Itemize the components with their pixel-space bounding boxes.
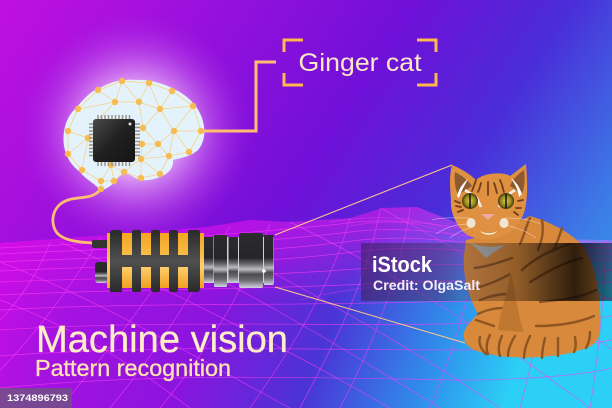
- cat body stripes: [475, 218, 596, 358]
- wireframe ground: [0, 207, 612, 408]
- watermark logo: iStock: [372, 252, 433, 277]
- title: Machine vision: [36, 319, 288, 361]
- network links: [68, 81, 201, 189]
- subtitle: Pattern recognition: [35, 355, 231, 381]
- cat chest and leg: [498, 270, 524, 332]
- dark grip: [110, 230, 200, 292]
- label: Ginger cat: [284, 40, 436, 85]
- cat eyes: [462, 190, 515, 209]
- cable: brain to camera: [53, 189, 101, 243]
- connector wire: brain to label: [201, 62, 276, 131]
- yellow body: [107, 233, 204, 288]
- cat forehead stripes: [455, 180, 523, 215]
- brain glow: [0, 0, 280, 270]
- cat ears: [455, 170, 525, 195]
- icon: microchip: [89, 115, 140, 166]
- watermark credit: Credit: OlgaSalt: [373, 278, 481, 293]
- icon: brain with neural network: [63, 78, 204, 192]
- network nodes: [65, 78, 204, 192]
- cat head: [450, 164, 527, 240]
- image id tag: [0, 388, 72, 408]
- cat muzzle and nose: [466, 214, 508, 235]
- image id tag: 1374896793: [7, 393, 68, 404]
- cat body: [464, 216, 600, 357]
- watermark band: [361, 243, 612, 301]
- cat whiskers: [432, 218, 540, 238]
- label: Ginger cat: Ginger cat: [298, 49, 422, 77]
- field of view lines: [275, 165, 465, 343]
- rear plugs: [92, 240, 108, 248]
- illustration: ginger cat: [432, 164, 600, 358]
- icon: camera: [92, 230, 274, 292]
- lens barrel: [204, 237, 274, 283]
